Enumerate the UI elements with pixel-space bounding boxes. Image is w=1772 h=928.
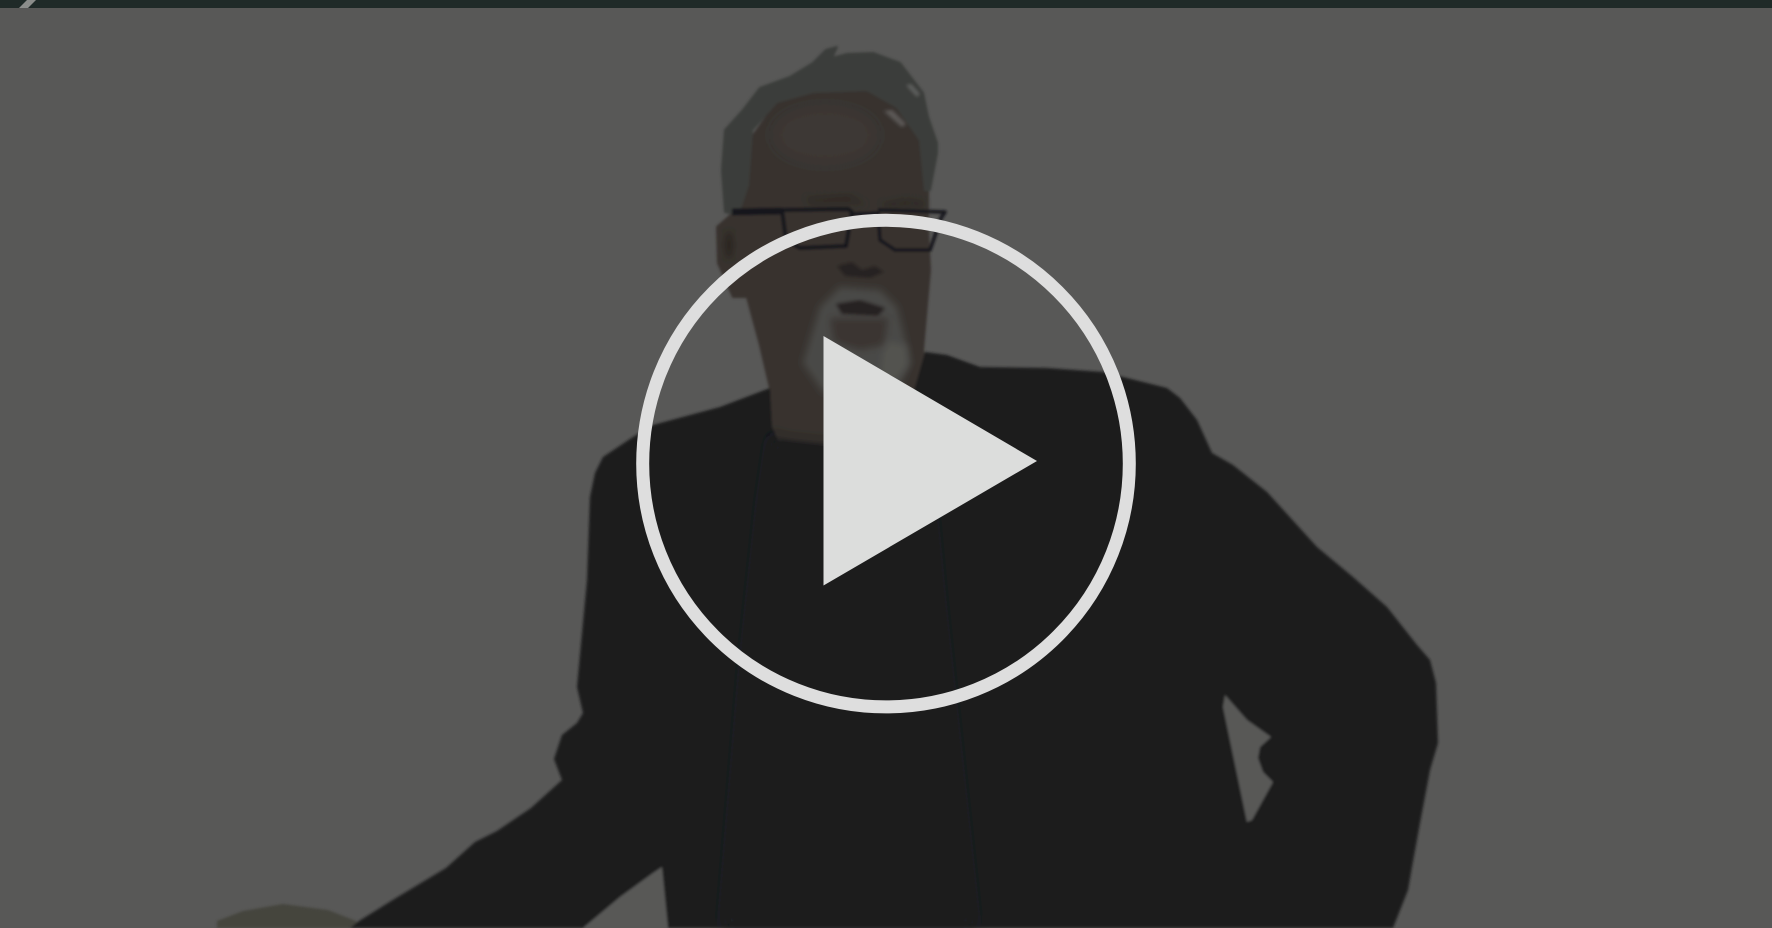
forehead highlight — [884, 110, 906, 127]
top bar — [0, 0, 1772, 8]
elbow gap — [1223, 695, 1273, 822]
play ring — [643, 220, 1129, 707]
glasses — [732, 209, 945, 250]
presenter hair — [722, 47, 937, 215]
arm gap — [583, 867, 668, 928]
nose shadow — [837, 262, 884, 278]
presenter neck and face — [717, 88, 930, 450]
mouth — [836, 300, 885, 316]
ear shadow — [724, 231, 734, 259]
beard — [803, 287, 910, 392]
forehead glow — [775, 109, 875, 161]
presenter hand — [217, 904, 362, 928]
jacket — [350, 352, 1438, 928]
play triangle — [824, 336, 1037, 586]
play button — [643, 220, 1129, 707]
presenter — [217, 47, 1438, 928]
hair highlight — [906, 84, 920, 97]
chin skin — [830, 318, 888, 350]
eyebrow shadow — [805, 194, 925, 208]
shirt — [723, 432, 975, 928]
goatee highlight — [880, 340, 908, 385]
